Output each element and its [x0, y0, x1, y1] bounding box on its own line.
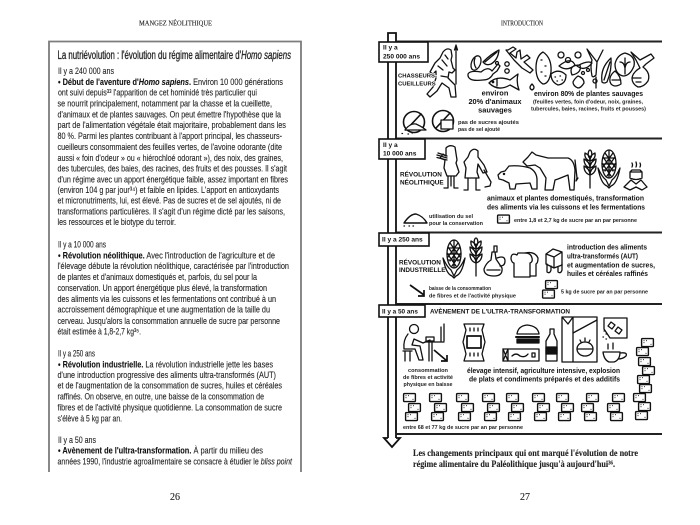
text block: 250 years ago: Il y a 250 ans [58, 348, 95, 358]
note: declining fibre and activity [429, 286, 516, 300]
description: ultra-processed foods: introduction des aliments [567, 242, 647, 252]
label: 80% wild plants [531, 89, 646, 112]
text block: 240 000 years ago: aussi « foin d'odeur » ou « hiérochloé odorant »), des noix, des graines, [58, 153, 283, 163]
label: 20% wild animals: 20% d'animaux [468, 97, 522, 106]
figure caption: régime alimentaire du Paléolithique jusqu'à aujourd'hui³⁶. [413, 460, 615, 470]
date label: 10 000 years: 10 000 ans [383, 150, 417, 158]
right page header: INTRODUCTION [501, 20, 543, 28]
text block: 10 000 years ago: de plantes et d'animaux domestiqués et, parfois, du sel pour la [58, 272, 257, 282]
icon: burger [516, 325, 539, 343]
text block: 240 000 years ago: Il y a 240 000 ans [58, 66, 114, 76]
text block: 240 000 years ago: et micronutriments, lui, est élevé. Pas de sucres et de sel ajoutés, ni de [58, 196, 281, 206]
arrow: declining activity [434, 350, 447, 361]
text block: 240 000 years ago: • Début de l'aventure d'Homo sapiens. Environ 10 000 générations [58, 77, 283, 87]
icon: two sugar cubes [543, 281, 557, 298]
icon: farming women [437, 146, 491, 190]
label: 80% wild plants: (feuilles vertes, foin d'odeur, noix, graines, [533, 100, 643, 106]
panel: hunter-gatherers [379, 42, 662, 134]
text block: 10 000 years ago: accroissement démographique et une augmentation de la taille du [58, 304, 270, 314]
left page number: 26 [170, 492, 180, 503]
sugar cubes: 68 to 77 kg [404, 339, 654, 421]
text block: 10 000 years ago: • Révolution néolithique. Avec l'introduction de l'agriculture et de [58, 250, 275, 260]
date label: 250 years [379, 233, 429, 246]
icon: cereal box [562, 317, 597, 362]
description: ultra-processed foods [567, 242, 655, 278]
text block: 240 000 years ago [58, 66, 288, 227]
text block: 240 000 years ago: se nourrit principalement, notamment par la chasse et la cueillette, [58, 98, 272, 108]
note: use of salt [429, 214, 484, 227]
date label: 250 000 years [379, 42, 428, 62]
icon: cow [523, 152, 578, 190]
text block: 250 years ago: s'élève à 5 kg par an. [58, 414, 122, 424]
note: no added sugar or salt: pas de sucres ajoutés [458, 120, 519, 126]
text block: 10 000 years ago: cerveau. Jusqu'alors la consommation annuelle de sucre par personne [58, 316, 280, 326]
note: declining fibre and activity: de fibres et activité [403, 375, 453, 381]
text block: 250 years ago: raffinés. On observe, en outre, une baisse de la consommation de [58, 392, 264, 402]
icon: soda bottle [546, 329, 557, 361]
heading: hunter-gatherers: CUEILLEURS [398, 82, 436, 88]
icon: wheat [470, 238, 482, 276]
description: intensive farming and additives [467, 366, 620, 384]
note: declining fibre and activity: de fibres et de l'activité physique [429, 294, 516, 300]
heading: industrial revolution [399, 258, 446, 274]
note: declining fibre and activity: physique en baisse [404, 382, 452, 388]
icon: dripping sugar cube [546, 249, 562, 273]
note: sugar 1.8 to 2.7 kg: entre 1,8 et 2,7 kg de sucre par an par personne [514, 218, 637, 224]
heading: ultra-transformation: AVÈNEMENT DE L'ULTRA-TRANSFORMATION [430, 306, 570, 316]
text block: 240 000 years ago: cueilleurs consommaient des feuilles vertes, de l'avoine odorante (dite [58, 142, 282, 152]
description: intensive farming and additives: élevage intensif, agriculture intensive, explosion [467, 366, 620, 375]
text block: 10 000 years ago: Il y a 10 000 ans [58, 240, 106, 250]
note: declining fibre and activity: consommation [408, 368, 449, 374]
text block: 10 000 years ago [58, 240, 289, 336]
description: ultra-processed foods: et augmentation de sucres, [567, 260, 655, 270]
icon: cup [603, 343, 626, 362]
text block: 240 000 years ago: ont suivi depuis³³ l'apparition de cet hominidé très particulier qui [58, 88, 257, 98]
heading: neolithic revolution [400, 170, 444, 186]
panel title: La nutriévolution : l'évolution du régime alimentaire d'Homo sapiens [58, 48, 291, 62]
text block: 240 000 years ago: les ressources et le biotype du terroir. [58, 217, 176, 227]
text block: 240 000 years ago: transformations particulières. Il s'agit d'un régime dicté par les saisons, [58, 206, 285, 216]
date label: 250 000 years: Il y a [383, 44, 398, 52]
panel: nutrition evolution text box [49, 42, 301, 472]
date label: 10 000 years: Il y a [383, 142, 398, 149]
panel: ultra-transformation [379, 304, 662, 434]
note: declining fibre and activity [403, 368, 453, 388]
label: 20% wild animals: sauvages [478, 106, 512, 114]
text block: 250 years ago: fibres et de l'activité physique quotidienne. La consommation de sucre [58, 402, 282, 412]
text block: 50 years ago: années 1990, l'industrie agroalimentaire se consacre à étudier le bliss point [58, 456, 292, 466]
icon: pig [498, 166, 537, 189]
date label: 250 000 years: 250 000 ans [383, 54, 420, 60]
text block: 50 years ago: • Avènement de l'ultra-transformation. À partir du milieu des [58, 446, 263, 456]
icon: no added salt [432, 110, 454, 132]
date label: 50 years: Il y a 50 ans [382, 308, 418, 316]
figure caption [413, 449, 638, 470]
text block: 10 000 years ago: l'élevage débute la révolution néolithique, caractérisée par l'introduction [58, 261, 289, 271]
icon: corn [598, 150, 620, 188]
description: domesticated animals and plants: animaux et plantes domestiqués, transformation [487, 194, 644, 202]
note: use of salt: utilisation du sel [429, 214, 473, 220]
text block: 240 000 years ago: (environ 104 g par jour³⁴) et faible en lipides. L'apport en antioxydants [58, 185, 279, 195]
description: ultra-processed foods: ultra-transformés (AUT) [567, 252, 638, 260]
label: 20% wild animals: environ [482, 88, 509, 98]
text block: 250 years ago [58, 348, 282, 424]
icon: person at desk [403, 324, 444, 361]
note: no added sugar or salt [458, 120, 519, 133]
note: declining fibre and activity: baisse de la consommation [429, 286, 491, 292]
text block: 10 000 years ago: des aliments via les cuissons et les fermentations ont contribué à un [58, 294, 276, 304]
text block: 10 000 years ago: était estimée à 1,8-2,7 kg³⁵. [58, 326, 141, 336]
text block: 250 years ago: d'une introduction progressive des aliments ultra-transformés (AUT) [58, 370, 276, 380]
icon: cooking fire [624, 162, 647, 190]
icon: bread [511, 253, 538, 277]
icon: sugar packet [603, 318, 627, 339]
heading: hunter-gatherers: CHASSEURS- [398, 74, 437, 80]
icon: oil bottle [484, 246, 505, 276]
icon: wheat [584, 150, 596, 188]
icon: sugar cube [498, 215, 509, 223]
text block: 250 years ago: • Révolution industrielle. La révolution industrielle jette les bases [58, 360, 273, 370]
icon: food packet [463, 324, 485, 361]
note: sugar 68 to 77 kg: entre 68 et 77 kg de sucre par an par personne [403, 425, 523, 431]
description: domesticated animals and plants: des aliments via les cuissons et les fermentations [487, 202, 645, 212]
date label: 50 years [379, 305, 425, 317]
heading: hunter-gatherers [398, 74, 437, 88]
text block: 10 000 years ago: conservation. Un apport énergétique plus élevé, la transformation [58, 283, 267, 293]
text block: 240 000 years ago: d'un régime avec un apport énergétique faible, assez important en fibres [58, 174, 288, 184]
date label: 250 years: Il y a 250 ans [382, 236, 423, 244]
icon: no added sugar [402, 112, 426, 134]
icon: salt pile [404, 214, 427, 226]
text block: 240 000 years ago: 80 %. Parmi les plantes contribuant à l'apport principal, les chasseurs- [58, 131, 282, 141]
description: domesticated animals and plants [487, 194, 645, 212]
note: use of salt: pour la conservation [429, 221, 484, 227]
label: 80% wild plants: tubercules, baies, racines, fruits et pousses) [531, 106, 646, 112]
panel: neolithic revolution [379, 138, 662, 227]
label: 80% wild plants: environ 80% de plantes sauvages [534, 89, 643, 98]
date label: 10 000 years [379, 139, 425, 159]
heading: neolithic revolution: NÉOLITHIQUE [400, 178, 444, 186]
panel: industrial revolution [379, 232, 662, 300]
note: no added sugar or salt: pas de sel ajouté [458, 127, 500, 133]
right page number: 27 [520, 492, 530, 503]
label: 20% wild animals [468, 88, 522, 114]
description: intensive farming and additives: de plats et condiments préparés et des additifs [469, 374, 620, 384]
heading: industrial revolution: RÉVOLUTION [399, 258, 441, 266]
description: ultra-processed foods: huiles et céréales raffinés [567, 269, 648, 278]
icon: chocolate bar package [503, 349, 539, 361]
text block: 240 000 years ago: part de l'alimentation végétale était majoritaire, probablement dans les [58, 120, 286, 130]
icon: hunter [427, 45, 458, 97]
text block: 240 000 years ago: d'animaux et de plantes sauvages. On peut émettre l'hypothèse que la [58, 110, 281, 120]
icons: wild animals and plants [468, 47, 654, 90]
arrow: declining fibre [410, 285, 424, 296]
text block: 50 years ago: Il y a 50 ans [58, 435, 96, 445]
heading: neolithic revolution: RÉVOLUTION [400, 170, 442, 178]
heading: industrial revolution: INDUSTRIELLE [399, 267, 446, 274]
left page header: MANGEZ NÉOLITHIQUE [139, 20, 212, 28]
text block: 50 years ago [58, 435, 292, 466]
text block: 240 000 years ago: des tubercules, des baies, des racines, des fruits et des pousses. Il s'agit [58, 164, 287, 174]
timeline arrow [384, 33, 400, 447]
note: sugar 5 kg: 5 kg de sucre par an par personne [561, 290, 648, 296]
text block: 250 years ago: et de l'augmentation de la consommation de sucres, huiles et céréales [58, 380, 282, 390]
icon: corn [443, 240, 465, 278]
figure caption: Les changements principaux qui ont marqué l'évolution de notre [413, 449, 638, 459]
